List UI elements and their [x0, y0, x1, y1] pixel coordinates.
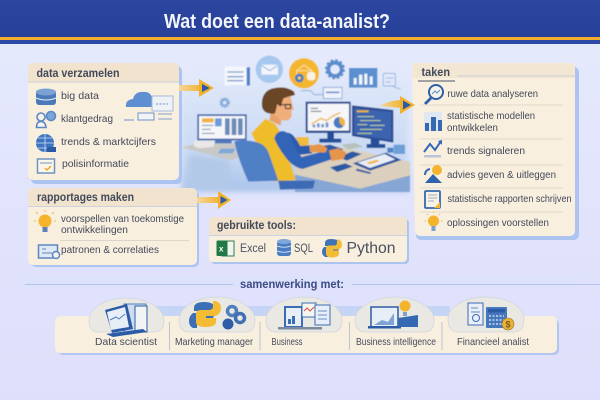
main desk: [295, 144, 410, 189]
label: Financieel analist: [457, 336, 529, 348]
glasses: [279, 103, 291, 106]
centre monitor: [306, 102, 351, 143]
icon: document, calculator, coin: $: [506, 320, 511, 330]
icon: bar chart card: [349, 68, 377, 88]
icon: database: [36, 88, 56, 105]
chair: [234, 140, 315, 190]
heading: taken: [422, 67, 450, 79]
analyst: [251, 87, 346, 182]
label: Business: [272, 336, 302, 348]
label: Data scientist: [95, 336, 157, 348]
text: [447, 110, 535, 134]
panel: data verzamelen: [28, 63, 182, 184]
text: statistische rapporten schrijven: [448, 193, 572, 205]
icon: gear: [326, 60, 344, 78]
text: [61, 213, 184, 236]
central illustration: data analyst at desk: [182, 56, 410, 192]
text: klantgedrag: [61, 113, 113, 125]
icon: Excel: [216, 240, 234, 256]
text: ontwikkelen: [447, 122, 498, 134]
text: ruwe data analyseren: [448, 88, 538, 100]
panel: gebruikte tools: [209, 217, 409, 264]
icon: customers: [36, 112, 56, 128]
code monitor: [352, 105, 393, 148]
icon: network circle: [289, 58, 319, 88]
title: Wat doet een data-analist?: [164, 10, 390, 33]
heading: rapportages maken: [37, 192, 134, 204]
hair: [262, 87, 295, 114]
icon: python and gears: [189, 301, 244, 328]
icon: Python logo: [322, 239, 342, 258]
header banner: [0, 0, 600, 44]
text: big data: [61, 90, 99, 102]
icon: SQL database: [277, 239, 291, 256]
icon: lightbulb: [34, 210, 56, 232]
text: Excel: [240, 243, 266, 255]
text: polisinformatie: [62, 158, 129, 170]
icon: trend line: [424, 140, 442, 158]
vest: [251, 119, 296, 182]
icon: small gear: [220, 98, 229, 107]
text: trends signaleren: [447, 145, 525, 157]
icon: lightbulb: [424, 212, 442, 231]
icon: document, calculator, coin: [468, 303, 514, 330]
desk items: [330, 143, 405, 174]
icon: business dashboard: [278, 303, 330, 330]
keyboards: [320, 145, 362, 161]
panel: taken: [412, 63, 579, 240]
text: patronen & correlaties: [61, 244, 159, 256]
domes: [89, 297, 524, 332]
text: statistische modellen: [447, 110, 535, 122]
icon: patterns card: [38, 245, 60, 258]
icon: globe: [36, 134, 56, 152]
papers on back desk: [194, 141, 235, 153]
icon: envelope circle: [256, 56, 283, 83]
arrow: analyst to taken: [380, 96, 415, 114]
icon: BI chart with bulb: [368, 300, 418, 328]
icon: Excel: x: [219, 244, 224, 254]
icon: policy card: [38, 159, 54, 173]
panel: samenwerking: [55, 297, 559, 355]
near arm: [274, 131, 333, 169]
icon: note: [383, 73, 401, 89]
head: [269, 93, 294, 121]
panel: rapportages maken: [28, 188, 199, 267]
text: oplossingen voorstellen: [447, 217, 549, 229]
icon: magnifier: [425, 85, 443, 104]
text: advies geven & uitleggen: [447, 169, 556, 181]
text: SQL: [294, 243, 313, 255]
arrow: rapportages to tools: [197, 191, 231, 209]
divider and heading: samenwerking met: [20, 277, 600, 291]
icon: bar chart: [424, 112, 442, 131]
icon: advice: [425, 165, 442, 183]
divider and heading: samenwerking met: samenwerking met:: [240, 279, 344, 291]
text: ontwikkelingen: [61, 224, 128, 236]
illustration backdrop: [182, 70, 408, 192]
heading: gebruikte tools:: [217, 220, 296, 232]
hands: [309, 144, 346, 161]
text: Python: [346, 240, 396, 257]
blue base under main desk: [295, 170, 410, 192]
text: voorspellen van toekomstige: [61, 213, 184, 225]
icon: report: [425, 191, 440, 208]
text: trends & marktcijfers: [61, 136, 156, 148]
icon: report sheet: [225, 67, 250, 86]
left monitor: [197, 114, 247, 143]
icon: laptop with documents: [105, 304, 147, 337]
back desk: [182, 143, 252, 189]
label: Marketing manager: [175, 336, 253, 348]
arrow: data verzamelen to analyst: [179, 79, 214, 97]
far arm: [282, 132, 312, 155]
neck: [269, 112, 282, 126]
icon: cloud with data: [124, 92, 173, 120]
heading: data verzamelen: [36, 68, 120, 80]
coffee mug: [294, 137, 309, 146]
icon: connector window: [301, 87, 342, 99]
label: Business intelligence: [356, 336, 436, 348]
